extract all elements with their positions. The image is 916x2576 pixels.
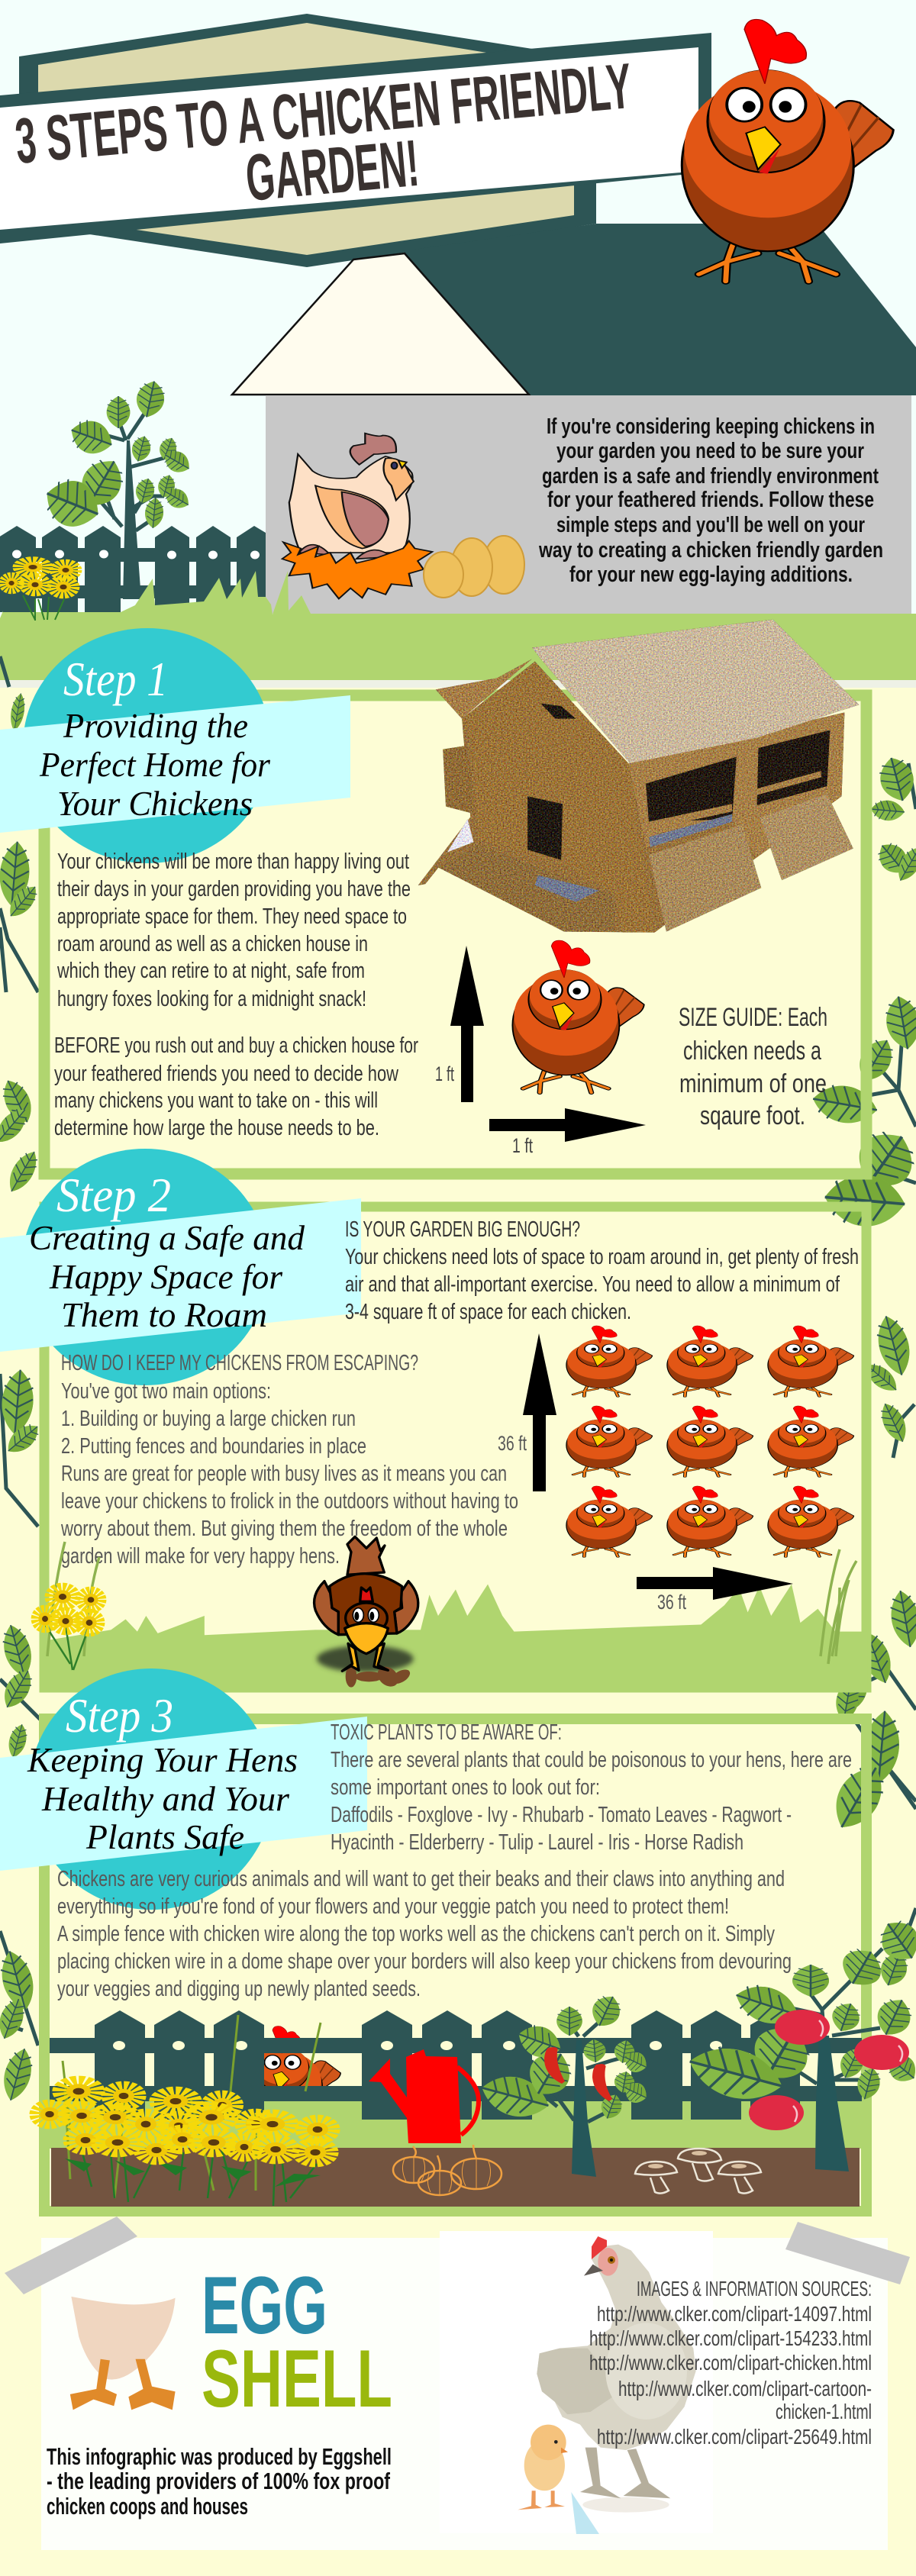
step 1 body text: their days in your garden providing you have the xyxy=(57,877,411,901)
produced by text: - the leading providers of 100% fox proof xyxy=(47,2468,391,2494)
size guide text: SIZE GUIDE: Each xyxy=(679,1003,827,1032)
escaping text: 1. Building or buying a large chicken run xyxy=(61,1407,356,1431)
curious chickens text: your veggies and digging up newly planted seeds. xyxy=(57,1977,421,2001)
lawn xyxy=(50,2101,862,2149)
arrow up 36 ft xyxy=(523,1333,556,1491)
egg shell logo icon xyxy=(70,2297,176,2410)
icon: big chicken xyxy=(682,19,893,282)
step 1 body text: hungry foxes looking for a midnight snack! xyxy=(57,987,366,1011)
produced by text: chicken coops and houses xyxy=(47,2493,248,2520)
grass ground xyxy=(47,1585,867,1692)
step 1 heading xyxy=(39,706,271,823)
logo text SHELL: SHELL xyxy=(202,2333,392,2424)
green grass band xyxy=(0,571,916,680)
step 1 body text: determine how large the house needs to be. xyxy=(54,1116,379,1140)
label 1 ft horizontal: 1 ft xyxy=(512,1134,533,1157)
label 1 ft vertical: 1 ft xyxy=(435,1062,454,1085)
title banner xyxy=(0,33,711,243)
icon: mushrooms xyxy=(635,2149,761,2194)
tall grass xyxy=(47,1542,856,1664)
left tape xyxy=(5,2217,137,2294)
escaping text: worry about them. But giving them the freedom of the whole xyxy=(60,1517,508,1541)
step 1 heading: Your Chickens xyxy=(57,784,253,823)
icon: brown chicken from front xyxy=(314,1536,418,1691)
step 3 heading xyxy=(27,1740,298,1856)
step 1 body text: BEFORE you rush out and buy a chicken house for xyxy=(54,1033,418,1058)
step 1 label: Step 1 xyxy=(63,652,168,706)
sources text: chicken-1.html xyxy=(776,2400,872,2423)
header fence xyxy=(0,526,266,612)
sources text xyxy=(589,2277,872,2449)
garden size text: IS YOUR GARDEN BIG ENOUGH? xyxy=(345,1217,580,1242)
garden size text xyxy=(345,1217,859,1324)
step 2 ribbon xyxy=(0,1198,361,1352)
icon: eggs xyxy=(424,536,524,598)
step 2 heading: Happy Space for xyxy=(49,1257,283,1296)
step 3 ribbon xyxy=(0,1717,367,1871)
step 1 body text: appropriate space for them. They need space to xyxy=(57,904,407,929)
size guide text: sqaure foot. xyxy=(700,1101,805,1130)
title line 2: GARDEN! xyxy=(243,127,422,215)
panel: step 1 xyxy=(0,620,866,1174)
chicken grid xyxy=(566,1326,854,1557)
toxic plants text: Hyacinth - Elderberry - Tulip - Laurel - Iris - Horse Radish xyxy=(331,1830,743,1855)
step 1 heading: Perfect Home for xyxy=(39,745,271,784)
escaping text: 2. Putting fences and boundaries in place xyxy=(61,1434,366,1459)
label 36 ft horizontal: 36 ft xyxy=(657,1591,686,1614)
produced by text: This infographic was produced by Eggshell xyxy=(47,2443,392,2470)
step 3 heading: Healthy and Your xyxy=(41,1779,290,1818)
escaping text: Runs are great for people with busy lives as it means you can xyxy=(61,1462,507,1486)
left fence pickets over grass xyxy=(3,603,121,612)
icon: onions xyxy=(393,2145,502,2195)
size guide arrow right xyxy=(489,1108,646,1142)
hen and chick photo xyxy=(518,2236,696,2534)
tomato plant xyxy=(684,1913,916,2171)
toxic plants text: TOXIC PLANTS TO BE AWARE OF: xyxy=(331,1720,562,1745)
intro text xyxy=(538,414,883,587)
label 36 ft vertical: 36 ft xyxy=(498,1432,527,1455)
icon: chicken behind fence xyxy=(264,2026,341,2086)
step 1 body text: your feathered friends you need to decide how xyxy=(54,1062,399,1086)
sign board xyxy=(19,14,596,267)
coop roof xyxy=(403,224,916,395)
step 3 heading: Plants Safe xyxy=(85,1817,244,1856)
pale strip under green band xyxy=(0,680,916,688)
grey intro panel xyxy=(266,395,911,614)
icon: red watering can xyxy=(369,2049,479,2143)
curious chickens text xyxy=(57,1867,792,2001)
side foliage xyxy=(0,656,916,2104)
small flowers header xyxy=(3,560,76,621)
footer card xyxy=(5,2217,910,2550)
flowers step 2 xyxy=(36,1588,102,1670)
right tape xyxy=(785,2222,910,2284)
produced by text xyxy=(47,2443,392,2520)
step 1 heading: Providing the xyxy=(63,706,248,745)
cream page background xyxy=(0,682,916,2576)
escaping text xyxy=(60,1351,518,1568)
coop gable xyxy=(232,253,529,395)
step 1 body text: roam around as well as a chicken house in xyxy=(57,932,368,956)
step 2 heading xyxy=(29,1218,305,1334)
step 1 body text: many chickens you want to take on - this will xyxy=(54,1088,378,1113)
logo text EGG: EGG xyxy=(202,2259,327,2351)
step 2 heading: Them to Roam xyxy=(61,1295,267,1334)
escaping text: garden will make for very happy hens. xyxy=(61,1544,340,1568)
chilli plant xyxy=(477,1991,650,2177)
size guide arrow up xyxy=(450,946,484,1102)
step 2 circle xyxy=(21,1149,269,1385)
step 2 heading: Creating a Safe and xyxy=(29,1218,305,1257)
soil xyxy=(51,2148,860,2207)
flower bed xyxy=(36,2015,333,2206)
step 1 body text: which they can retire to at night, safe from xyxy=(56,959,365,983)
step 1 body text xyxy=(54,850,418,1140)
toxic plants text: some important ones to look out for: xyxy=(331,1775,600,1800)
icon: hen on nest xyxy=(282,434,432,598)
photo panel xyxy=(440,2231,713,2533)
panel: step 2 xyxy=(0,1149,867,1692)
step 1 circle xyxy=(23,628,272,863)
step 3 heading: Keeping Your Hens xyxy=(27,1740,298,1779)
garden size text: 3-4 square ft of space for each chicken. xyxy=(345,1300,631,1324)
garden fence xyxy=(50,2010,862,2120)
escaping text: You've got two main options: xyxy=(61,1379,271,1404)
size guide text xyxy=(679,1003,827,1130)
step 1 body text: Your chickens will be more than happy living out xyxy=(57,850,409,874)
size guide text: chicken needs a xyxy=(683,1037,821,1066)
header tree xyxy=(38,379,194,599)
size guide text: minimum of one xyxy=(679,1069,827,1098)
escaping text: leave your chickens to frolick in the outdoors without having to xyxy=(61,1489,518,1514)
arrow right 36 ft xyxy=(637,1567,793,1600)
sky background xyxy=(0,0,916,618)
step 1 ribbon xyxy=(0,695,350,833)
step 3 circle xyxy=(29,1668,273,1910)
escaping text: HOW DO I KEEP MY CHICKENS FROM ESCAPING? xyxy=(61,1351,418,1375)
step 2 label: Step 2 xyxy=(56,1168,171,1222)
panel: step 3 xyxy=(0,1668,916,2211)
icon: size guide chicken xyxy=(512,940,644,1093)
chicken coop xyxy=(418,620,860,933)
toxic plants text xyxy=(331,1720,852,1855)
step 3 label: Step 3 xyxy=(66,1688,173,1743)
